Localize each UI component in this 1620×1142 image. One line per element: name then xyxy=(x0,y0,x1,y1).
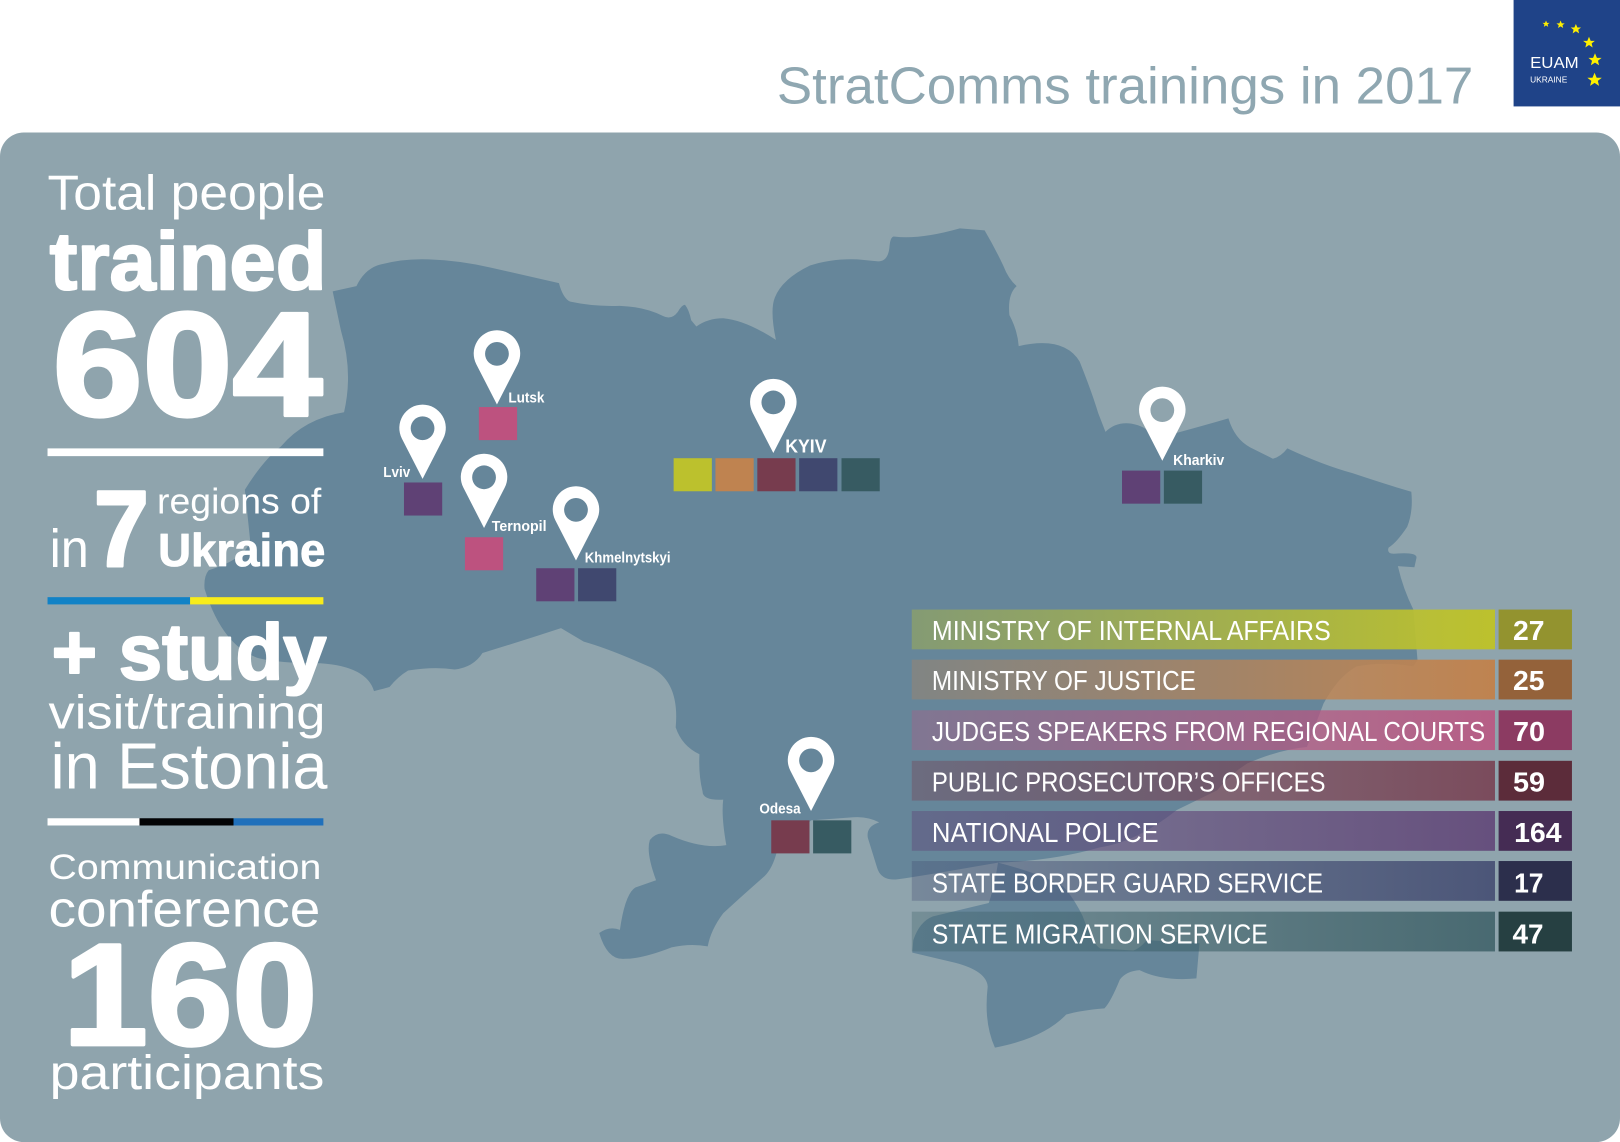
panel: left statistics xyxy=(48,165,328,1100)
legend row: State Migration Service xyxy=(912,912,1572,951)
divider: Ukrainian flag colours xyxy=(48,597,323,604)
map marker: Lutsk xyxy=(474,330,545,440)
map marker: Kyiv: KYIV xyxy=(785,436,827,457)
number: 7: 7 xyxy=(94,469,149,589)
map marker: Ternopil: Ternopil xyxy=(492,519,547,535)
text: trained: trained xyxy=(50,216,326,307)
legend row: State Migration Service: STATE MIGRATION SERVICE xyxy=(932,918,1268,949)
text: Ukraine: Ukraine xyxy=(158,524,325,576)
map marker: Ternopil xyxy=(461,454,547,570)
legend row: Ministry of Internal Affairs: MINISTRY OF INTERNAL AFFAIRS xyxy=(932,615,1331,646)
logo stars xyxy=(1543,20,1602,86)
legend row: National Police: 164 xyxy=(1514,817,1562,848)
legend row: Ministry of Internal Affairs xyxy=(912,610,1572,649)
text: in Estonia: in Estonia xyxy=(51,729,328,802)
text: participants: participants xyxy=(50,1046,324,1100)
map marker: Lutsk: Lutsk xyxy=(508,390,545,406)
legend row: State Border Guard Service: 17 xyxy=(1514,868,1544,899)
legend row: Ministry of Justice: 25 xyxy=(1513,665,1545,696)
divider: Estonian flag colours xyxy=(48,818,323,825)
legend row: Judges speakers from regional courts: 70 xyxy=(1513,716,1545,747)
number: 160: 160 xyxy=(63,914,317,1076)
legend row: State Migration Service: 47 xyxy=(1513,918,1544,949)
text: regions of: regions of xyxy=(157,480,322,521)
legend row: Ministry of Internal Affairs: 27 xyxy=(1513,615,1545,646)
logo: EUAM Ukraine xyxy=(1514,0,1620,106)
legend row: Ministry of Justice: MINISTRY OF JUSTICE xyxy=(932,665,1196,696)
map marker: Kyiv xyxy=(674,379,880,491)
logo subtitle: UKRAINE xyxy=(1530,76,1568,85)
legend row: Public prosecutor's offices xyxy=(912,761,1572,801)
map marker: Odesa: Odesa xyxy=(759,802,802,818)
map marker: Kharkiv xyxy=(1122,387,1224,504)
number: 604: 604 xyxy=(53,282,322,447)
map marker: Kharkiv: Kharkiv xyxy=(1173,453,1224,469)
map marker: Lviv xyxy=(383,405,446,516)
map marker: Odesa xyxy=(759,737,851,853)
text: conference: conference xyxy=(49,881,320,938)
text: + study: + study xyxy=(52,608,327,696)
text: in: in xyxy=(50,519,89,579)
legend row: Judges speakers from regional courts: JUDGES SPEAKERS FROM REGIONAL COURTS xyxy=(932,716,1485,747)
map marker: Khmelnytskyi xyxy=(536,486,671,601)
legend row: State Border Guard Service xyxy=(912,861,1572,901)
legend row: Public prosecutor's offices: PUBLIC PROSECUTOR’S OFFICES xyxy=(932,766,1326,797)
divider: white bar xyxy=(48,448,323,456)
legend row: Ministry of Justice xyxy=(912,660,1572,699)
logo wordmark: EUAM xyxy=(1530,55,1579,72)
map of Ukraine xyxy=(204,228,1417,1048)
legend row: National Police: NATIONAL POLICE xyxy=(932,817,1159,848)
legend row: National Police xyxy=(912,811,1572,851)
text: visit/training: visit/training xyxy=(49,686,325,739)
legend row: Public prosecutor's offices: 59 xyxy=(1513,766,1545,797)
legend: agencies and participant counts xyxy=(912,610,1572,951)
text: Communication: Communication xyxy=(49,848,321,887)
text: Total people: Total people xyxy=(48,165,325,221)
title: StratComms trainings in 2017 xyxy=(777,56,1473,114)
legend row: State Border Guard Service: STATE BORDER GUARD SERVICE xyxy=(932,868,1323,899)
map marker: Khmelnytskyi: Khmelnytskyi xyxy=(585,551,671,567)
map marker: Lviv: Lviv xyxy=(383,465,410,481)
